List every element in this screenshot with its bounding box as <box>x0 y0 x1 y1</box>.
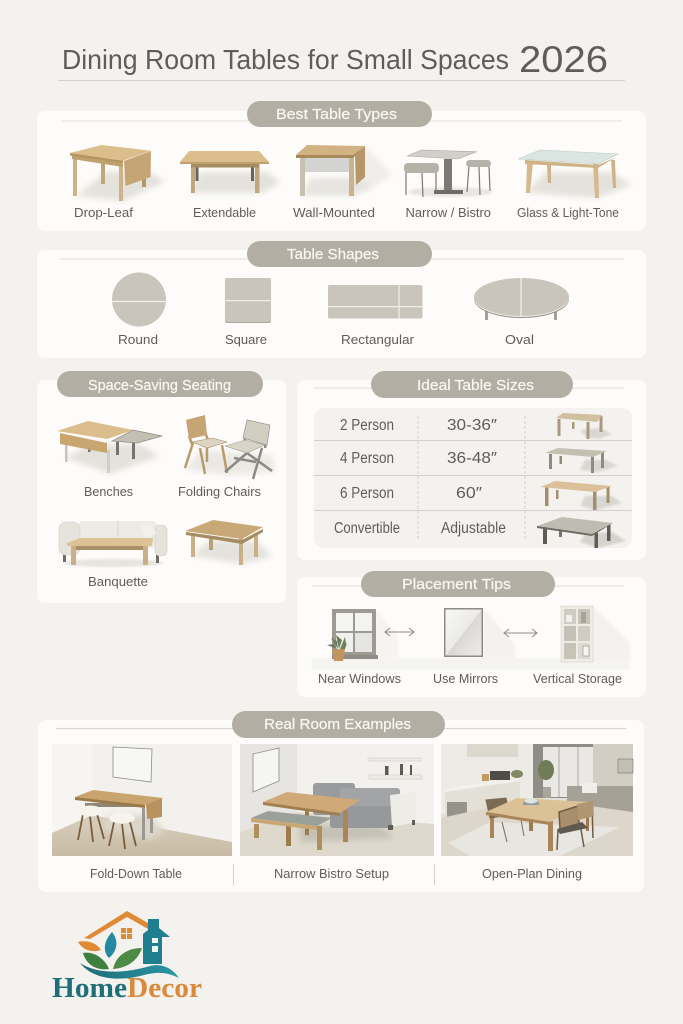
row: 2 person <box>340 413 612 439</box>
label: drop-leaf: Drop-Leaf <box>74 205 133 220</box>
icon: banquette sofa with table <box>59 521 167 567</box>
label: benches: Benches <box>84 484 133 499</box>
label: oval: Oval <box>505 332 534 347</box>
icon: window with plant <box>327 609 398 661</box>
row: 6 person: 6 Person <box>340 485 394 502</box>
label: wall-mounted: Wall-Mounted <box>293 205 375 220</box>
icon: round shape <box>112 272 166 326</box>
label: rectangular: Rectangular <box>341 332 415 347</box>
heading: placement tips: Placement Tips <box>402 576 511 593</box>
icon: mirror <box>444 608 515 658</box>
label: use mirrors: Use Mirrors <box>433 671 498 686</box>
heading: table shapes: Table Shapes <box>287 246 379 263</box>
icon: leaves <box>78 932 142 969</box>
panel: space-saving seating <box>37 371 286 603</box>
heading: ideal table sizes <box>371 371 573 398</box>
caption: fold-down table: Fold-Down Table <box>90 866 182 881</box>
logo: HomeDecor <box>52 911 202 1004</box>
label: vertical storage: Vertical Storage <box>533 671 622 686</box>
arrow: mirrors to storage <box>504 629 537 637</box>
row: 2 person: 30-36″ <box>447 417 498 434</box>
label: banquette: Banquette <box>88 574 148 589</box>
label: near windows: Near Windows <box>318 671 401 686</box>
icon: roof window <box>121 928 132 939</box>
heading: real room examples <box>232 711 445 738</box>
photo: narrow bistro room <box>240 744 434 856</box>
label: square: Square <box>225 332 267 347</box>
arrow: windows to mirrors <box>385 628 414 636</box>
icon: extendable table <box>180 151 280 193</box>
icon: vertical storage shelf <box>561 606 630 662</box>
caption: narrow bistro setup: Narrow Bistro Setup <box>274 866 389 881</box>
icon: rectangular shape <box>328 285 422 318</box>
heading: table shapes <box>247 241 432 267</box>
icon: glass and light-tone table <box>518 150 632 198</box>
row: 2 person: 2 Person <box>340 417 394 434</box>
row: 6 person: 60″ <box>456 485 483 502</box>
icon: small wood table <box>185 520 272 565</box>
icon: wall-mounted table <box>296 145 392 196</box>
photo: open-plan dining room <box>441 744 633 856</box>
icon: drop-leaf table <box>70 145 165 201</box>
row: 4 person <box>340 448 618 473</box>
heading: best table types <box>247 101 432 127</box>
heading: ideal table sizes: Ideal Table Sizes <box>417 377 534 394</box>
row: convertible <box>334 517 626 548</box>
label: narrow / bistro: Narrow / Bistro <box>406 205 491 220</box>
title: 2026 <box>519 39 608 80</box>
table: sizes <box>314 408 632 548</box>
panel: placement tips <box>297 571 646 697</box>
photo: fold-down table room <box>52 744 232 856</box>
row: convertible: Convertible <box>334 520 400 537</box>
panel: table shapes <box>37 241 646 358</box>
icon: wave <box>80 963 179 979</box>
row: convertible: Adjustable <box>441 520 506 537</box>
row: 4 person: 4 Person <box>340 450 394 467</box>
title: Dining Room Tables for Small Spaces <box>62 44 509 75</box>
heading: placement tips <box>361 571 555 597</box>
icon: square shape <box>225 278 271 323</box>
panel: ideal table sizes <box>297 371 646 560</box>
panel: real room examples <box>38 711 644 892</box>
label: round: Round <box>118 332 158 347</box>
label: folding chairs: Folding Chairs <box>178 484 261 499</box>
wordmark: HomeDecor <box>52 973 202 1004</box>
icon: oval shape <box>474 278 569 320</box>
icon: folding chairs <box>185 415 276 479</box>
label: glass and light-tone: Glass & Light-Tone <box>517 205 619 220</box>
row: 4 person: 36-48″ <box>447 450 498 467</box>
icon: house roof <box>84 911 148 939</box>
caption: open-plan dining: Open-Plan Dining <box>482 866 582 881</box>
panel: best table types <box>37 101 646 231</box>
heading: space-saving seating: Space-Saving Seating <box>88 377 231 394</box>
heading: real room examples: Real Room Examples <box>264 716 411 733</box>
icon: teal house <box>143 919 170 964</box>
title <box>62 39 608 80</box>
heading: space-saving seating <box>57 371 263 397</box>
row: 6 person <box>340 481 622 510</box>
icon: narrow bistro table with stools <box>404 150 492 197</box>
icon: benches table <box>57 421 162 474</box>
heading: best table types: Best Table Types <box>276 106 397 123</box>
label: extendable: Extendable <box>193 205 256 220</box>
